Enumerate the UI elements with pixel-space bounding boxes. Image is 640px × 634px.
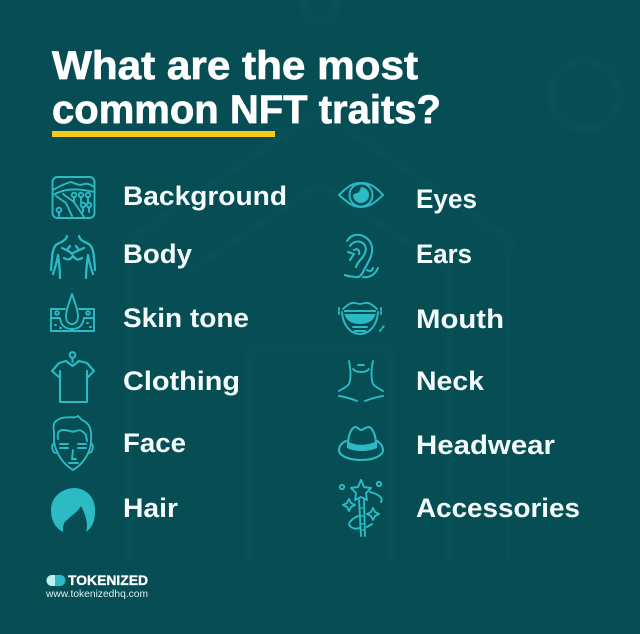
title underline [52, 131, 275, 137]
icon: neck [339, 361, 383, 401]
icon: face [52, 416, 93, 470]
logo mark [47, 575, 66, 586]
icon: mouth [339, 303, 384, 334]
label: Headwear: Headwear [416, 430, 556, 460]
footer logo [45, 573, 148, 600]
icon: hat headwear [339, 427, 383, 460]
icon: eye [339, 183, 383, 207]
icon: t-shirt clothing [52, 352, 94, 402]
icon: skin tone layers [51, 294, 94, 331]
label: Hair: Hair [123, 493, 179, 523]
icon: body torso [51, 236, 95, 278]
label: Neck: Neck [416, 366, 485, 396]
icon: hair [51, 488, 95, 532]
label: Eyes: Eyes [416, 184, 477, 214]
label: Face: Face [123, 428, 186, 458]
label: Clothing: Clothing [123, 366, 240, 396]
icon: magic wand accessories [340, 480, 382, 536]
label: Body: Body [123, 239, 192, 269]
brand name: TOKENIZED [68, 573, 148, 588]
website: www.tokenizedhq.com [45, 588, 148, 600]
label: Skin tone: Skin tone [123, 303, 249, 333]
title: common NFT traits? [52, 88, 441, 132]
label: Background: Background [123, 181, 287, 211]
icon: background landscape [52, 177, 94, 218]
label: Mouth: Mouth [416, 304, 504, 334]
label: Accessories: Accessories [416, 493, 580, 523]
label: Ears: Ears [416, 239, 472, 269]
title [52, 44, 441, 132]
title: What are the most [52, 44, 418, 88]
icon: ear [345, 235, 378, 277]
